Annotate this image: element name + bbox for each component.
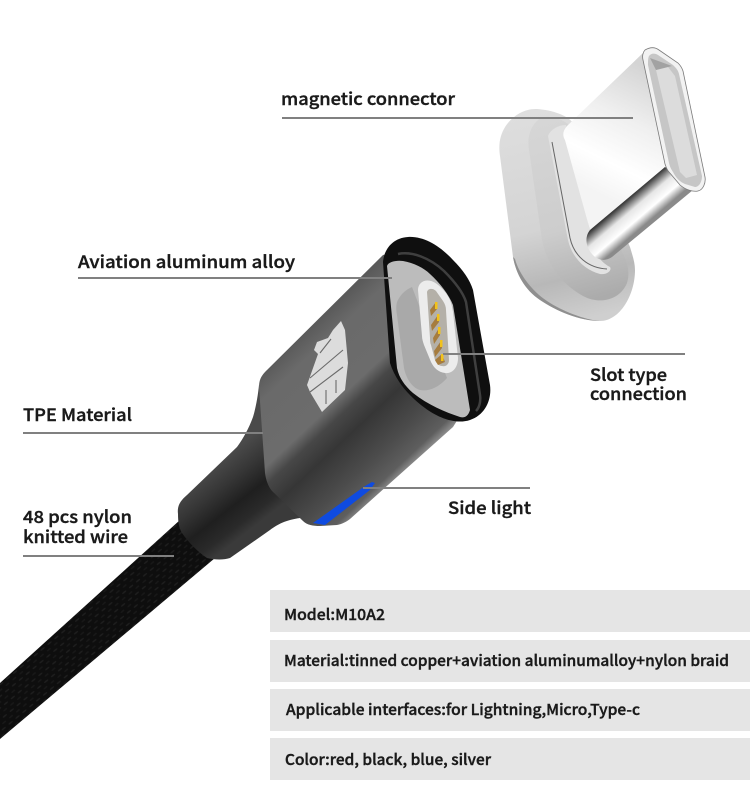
icon: socket shoulder xyxy=(396,287,447,390)
spec row: color xyxy=(270,738,750,780)
leader line: side light xyxy=(363,487,530,489)
label: nylon knitted wire xyxy=(23,503,132,548)
spec row: model: Model:M10A2 xyxy=(284,604,385,625)
icon: white socket rim xyxy=(418,280,458,373)
label: nylon knitted wire: knitted wire xyxy=(23,523,128,548)
icon: brand logo xyxy=(307,321,348,412)
icon: blue side light xyxy=(313,482,375,525)
spec row: model xyxy=(270,590,750,632)
gold pin highlights xyxy=(435,302,444,361)
leader line: slot type connection xyxy=(443,353,685,355)
icon: type-c magnetic connector xyxy=(499,48,705,321)
leader line: nylon wire xyxy=(23,555,174,557)
spec row: material xyxy=(270,640,750,682)
leader line: TPE material xyxy=(23,432,263,434)
label: nylon knitted wire: 48 pcs nylon xyxy=(23,503,132,528)
icon: TPE collar xyxy=(178,385,300,560)
label: TPE material: TPE Material xyxy=(23,401,132,426)
spec row: color: Color:red, black, blue, silver xyxy=(285,749,492,770)
icon: socket cavity xyxy=(427,289,449,366)
label: side light: Side light xyxy=(448,494,531,519)
leader line: magnetic connector xyxy=(282,117,633,119)
logo strokes xyxy=(310,339,343,404)
label: slot type connection xyxy=(590,361,687,405)
leader line: aviation aluminum alloy xyxy=(78,277,392,279)
icon: black face rim xyxy=(383,237,490,422)
icon: braided nylon cable xyxy=(0,520,215,739)
spec row: material: Material:tinned copper+aviation aluminumalloy+nylon braid xyxy=(284,650,729,671)
icon: gold pins xyxy=(430,302,445,365)
spec row: interfaces xyxy=(270,689,750,731)
label: magnetic connector: magnetic connector xyxy=(281,85,455,110)
icon: aluminium alloy head xyxy=(259,237,490,526)
spec row: interfaces: Applicable interfaces:for Lightning,Micro,Type-c xyxy=(286,699,640,720)
icon: grey face plate xyxy=(387,261,470,417)
label: slot type connection: connection xyxy=(590,380,687,405)
label: aviation aluminum alloy: Aviation aluminum alloy xyxy=(78,248,296,273)
label: slot type connection: Slot type xyxy=(590,361,667,386)
